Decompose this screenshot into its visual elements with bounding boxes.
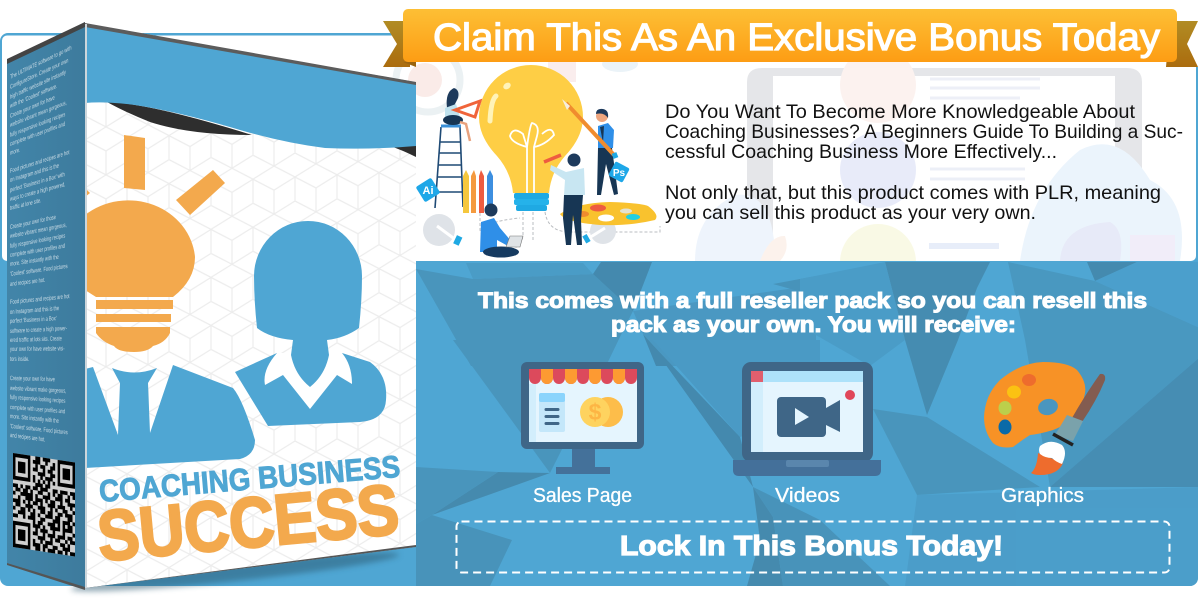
- panel: blue faceted background: [416, 262, 1200, 586]
- illustration: light bulb team: [416, 65, 660, 258]
- box: top edge: [85, 22, 416, 85]
- box: spine text: website vibrant mean gorgeous,: [10, 222, 67, 240]
- icon: man silhouette: [85, 365, 255, 468]
- box: spine text: perfect 'Business in a Box' with: [10, 171, 65, 194]
- reseller heading: [478, 288, 1147, 337]
- box: spine text: website vibrant make gorgeous,: [10, 385, 66, 395]
- seated man: [480, 204, 523, 258]
- call to action: [456, 522, 1170, 572]
- description text: Coaching Businesses? A Beginners Guide To Building a Suc-: [665, 121, 1183, 143]
- box: wave shadow: [107, 102, 416, 157]
- box: spine text: Create your own for those: [10, 214, 56, 231]
- box: spine text: fully responsive looking recipes: [10, 111, 65, 139]
- ribbon banner: [383, 9, 1198, 67]
- box: front face: [85, 22, 416, 592]
- box: spine text: fully responsive looking recipes: [10, 394, 66, 405]
- box: spine text: more.: [10, 147, 20, 157]
- label: graphics: Graphics: [1001, 485, 1084, 507]
- box: bottom edge: [85, 545, 416, 592]
- box: spine text: your own for have website visi-: [10, 346, 65, 353]
- box: spine text: ered traffic at lots sits. Create: [10, 336, 62, 344]
- box: spine text: perfect 'Business in a Box': [10, 315, 57, 325]
- box: spine text: The ULTIMATE software to go with: [10, 45, 71, 81]
- box: spine text: complete with user profiles and: [10, 404, 65, 416]
- box: spine text: 'Coolest' software. Food pictures: [10, 423, 68, 437]
- box: spine text: complete with user profiles and: [10, 121, 65, 148]
- box shadow: [70, 546, 400, 598]
- box: spine text: Food pictures and recipes are hot: [10, 293, 70, 306]
- box: spine text: and recipes are hot.: [10, 432, 45, 444]
- box: spine text: ConfigureStore. Create your own: [10, 58, 68, 91]
- dashed wires: [480, 212, 660, 250]
- icon: Ai badge: [416, 178, 440, 202]
- box: QR code: [13, 453, 75, 556]
- icon: graphics palette and brush: [984, 362, 1105, 475]
- icon: sales page monitor: $: [589, 399, 602, 425]
- icon: Ai badge: Ai: [422, 185, 434, 197]
- box: spine text: on Instagram and this is the: [10, 305, 59, 316]
- box: spine text: traffic at lone site.: [10, 197, 41, 212]
- icon: big yellow bulb: [479, 65, 583, 211]
- description text: Do You Want To Become More Knowledgeable About: [665, 101, 1136, 123]
- ladder: [435, 127, 463, 208]
- icon: sales page monitor: [521, 362, 644, 474]
- box: spine text: software to create a high power-: [10, 325, 67, 335]
- box: spine text: ways to create a high powered,: [10, 181, 65, 203]
- call to action: Lock In This Bonus Today!: [620, 530, 1003, 561]
- label: videos: Videos: [775, 485, 840, 507]
- box: spine text: 'Coolest' software. Food pictures: [10, 263, 68, 278]
- box: blue top band: [85, 25, 416, 149]
- description text: Not only that, but this product comes with PLR, meaning: [665, 182, 1161, 204]
- box title: SUCCESS: [94, 470, 402, 577]
- reseller heading: This comes with a full reseller pack so you can resell this: [478, 288, 1147, 313]
- box: spine text: Create your own for have: [10, 95, 55, 120]
- reseller heading: pack as your own. You will receive:: [611, 312, 1016, 337]
- ribbon title: Claim This As An Exclusive Bonus Today: [433, 17, 1160, 59]
- description text: you can sell this product as your very own.: [665, 202, 1036, 224]
- description text: cessful Coaching Business More Effectively...: [665, 141, 1057, 163]
- box: spine text: complete with user profiles and: [10, 243, 65, 259]
- right man with brush: [562, 99, 618, 195]
- box: spine text: Create your own for have: [10, 375, 55, 384]
- box: spine text: more. Site instantly with the: [10, 413, 59, 425]
- box: spine text: and recipes are hot.: [10, 277, 45, 288]
- box: spine text: [9, 45, 71, 444]
- box: spine text: with the 'Coolest' software.: [9, 83, 57, 111]
- product box: [7, 22, 416, 592]
- box: spine text: more. Site instantly with the: [10, 254, 59, 268]
- icon: Ps badge: [608, 161, 630, 183]
- box title: [99, 455, 400, 562]
- icon: Ps badge: Ps: [613, 168, 626, 179]
- woman on ladder: [441, 88, 480, 141]
- box: spine text: on Instagram and this is the: [10, 163, 59, 184]
- icon: orange light bulb: [85, 135, 225, 352]
- icon: woman silhouette: [235, 221, 386, 426]
- box: spine text: tors inside.: [10, 356, 29, 363]
- box: spine text: high traffic website site instantly: [10, 69, 66, 101]
- grey bulbs: [423, 214, 616, 246]
- description text: [665, 101, 1183, 224]
- faint background illustration: [392, 62, 1182, 261]
- box: spine text: Food pictures and recipes are hot: [10, 149, 70, 175]
- label: sales page: Sales Page: [533, 485, 632, 507]
- centre man: [544, 154, 585, 245]
- box: spine text: fully responsive looking recipes: [10, 233, 66, 250]
- paint palette: [560, 202, 656, 225]
- icon: videos laptop: [733, 362, 881, 476]
- box: spine text: website vibrant mean gorgeous,: [9, 100, 67, 130]
- box: spine: [7, 22, 85, 590]
- box title: COACHING BUSINESS: [98, 449, 402, 509]
- pencils: [463, 170, 493, 213]
